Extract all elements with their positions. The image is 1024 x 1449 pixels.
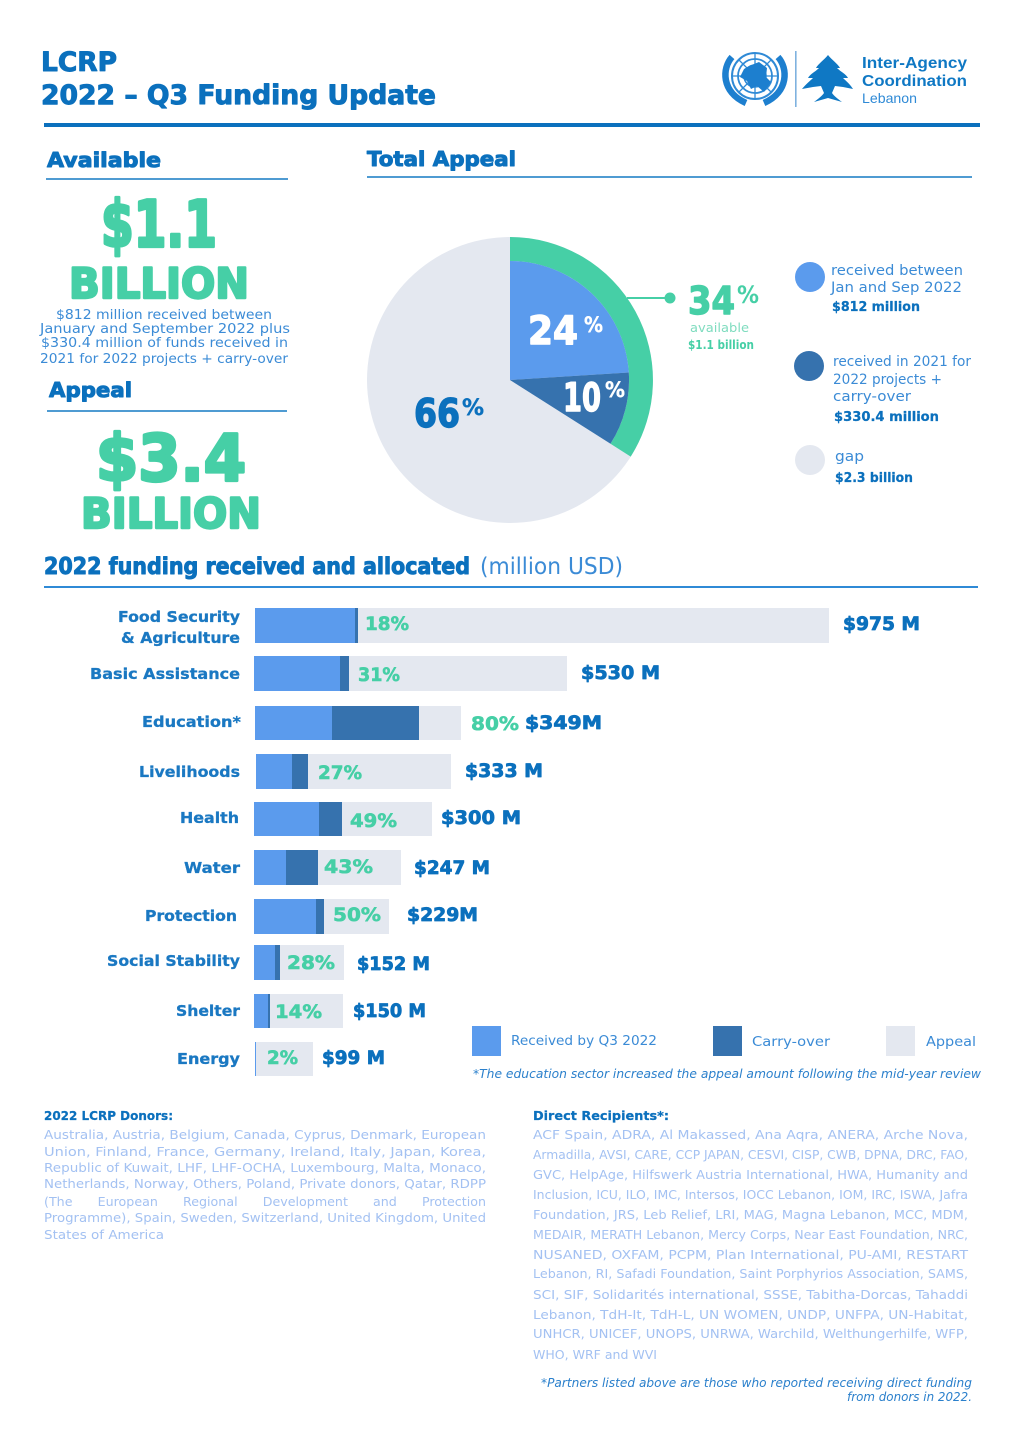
text block: donors: 2022 LCRP Donors:: [44, 1108, 173, 1123]
legend: gap: gap: [835, 449, 864, 465]
title: [41, 47, 436, 111]
row: livelihoods: 27%: [318, 762, 362, 784]
row: food security: $975 M: [843, 613, 920, 635]
text block: direct recipients: UNHCR, UNICEF, UNOPS, UNRWA, Warchild, Welthungerhilfe, WFP,: [533, 1327, 968, 1341]
text block: direct recipients: Inclusion, ICU, ILO, IMC, Intersos, IOCC Lebanon, IOM, IRC, ISWA, Jafra: [533, 1188, 968, 1202]
text block: direct recipients: Direct Recipients*:: [533, 1108, 669, 1123]
panel: total appeal: [367, 147, 972, 523]
row: protection: $229M: [407, 904, 478, 926]
logo text: Coordination: [862, 73, 967, 90]
panel: appeal: [47, 378, 287, 538]
text block: direct recipients: Armadilla, AVSI, CARE, CCP JAPAN, CESVI, CISP, CWB, DPNA, DRC, FAO,: [533, 1148, 968, 1162]
row: protection: 50%: [333, 904, 381, 926]
partners footnote: *Partners listed above are those who reported receiving direct funding: [541, 1376, 972, 1390]
legend: gap: $2.3 billion: [835, 470, 913, 486]
icon: cedar tree: [802, 55, 853, 102]
row: social stability: [107, 945, 430, 980]
text block: donors: Union, Finland, France, Germany, Ireland, Italy, Japan, Korea,: [44, 1145, 486, 1159]
text block: donors: [44, 1108, 486, 1242]
bar chart legend: [472, 1026, 976, 1056]
available description: $330.4 million of funds received in: [41, 336, 288, 351]
bar chart legend: Carry-over: [752, 1034, 830, 1050]
text block: direct recipients: [533, 1108, 969, 1362]
bar chart: funding by sector: [90, 608, 920, 1076]
divider line: [795, 51, 797, 107]
big number: 1.1 billion: [69, 188, 249, 308]
title: 2022 – Q3 Funding Update: [41, 80, 436, 111]
row: health: 49%: [350, 810, 397, 832]
education footnote: *The education sector increased the appeal amount following the mid-year review: [473, 1067, 981, 1081]
row: social stability: 28%: [287, 952, 335, 974]
heading: 2022 funding received and allocated: 2022 funding received and allocated: [44, 554, 470, 580]
row: basic assistance: Basic Assistance: [90, 665, 240, 683]
big number: 3.4 billion: $3.4: [96, 422, 246, 496]
text block: donors: Australia, Austria, Belgium, Canada, Cyprus, Denmark, European: [44, 1128, 486, 1142]
legend: received 2022: $812 million: [832, 299, 920, 315]
text block: direct recipients: NUSANED, OXFAM, PCPM, Plan International, PU-AMI, RESTART: [533, 1248, 969, 1262]
heading: 2022 funding received and allocated: [44, 554, 978, 588]
row: food security: [118, 608, 920, 647]
row: basic assistance: [90, 656, 660, 691]
callout: 34 percent available: $1.1 billion: [688, 338, 754, 352]
text block: direct recipients: SCI, SIF, Solidarités international, SSSE, Tabitha-Dorcas, Tahaddi: [533, 1288, 968, 1302]
row: education: 80%: [471, 713, 519, 735]
available description: [39, 308, 290, 367]
row: education: [142, 706, 602, 740]
big number: 1.1 billion: $1.1: [101, 188, 217, 262]
text block: direct recipients: MEDAIR, MERATH Lebanon, Mercy Corps, Near East Foundation, NRC,: [533, 1228, 968, 1242]
callout: 34 percent available: 34: [688, 279, 735, 323]
text block: donors: (The European Regional Development and Protection: [44, 1195, 486, 1209]
pie chart: 66: [414, 392, 460, 437]
text block: direct recipients: Lebanon, RI, Safadi Foundation, Saint Porphyrios Association, SAMS,: [533, 1267, 968, 1281]
row: water: $247 M: [414, 857, 490, 879]
pie legend: [794, 262, 971, 486]
row: water: 43%: [324, 856, 373, 878]
legend: received 2021: $330.4 million: [834, 409, 939, 425]
panel: available: [39, 148, 290, 367]
logo text: Lebanon: [862, 90, 917, 106]
text block: direct recipients: GVC, HelpAge, Hilfswerk Austria International, HWA, Humanity and: [533, 1168, 968, 1182]
icon: UN emblem: [725, 53, 785, 103]
legend: received 2021: received in 2021 for: [833, 354, 971, 370]
row: health: $300 M: [441, 807, 521, 829]
text block: direct recipients: WHO, WRF and WVI: [533, 1348, 657, 1362]
legend: received 2022: [795, 262, 963, 315]
text block: direct recipients: Lebanon, TdH-It, TdH-L, UN WOMEN, UNDP, UNFPA, UN-Habitat,: [533, 1308, 968, 1322]
pie chart: 24: [528, 309, 578, 354]
title: LCRP: [41, 47, 117, 78]
legend: gap: [795, 445, 913, 486]
pie chart: %: [462, 396, 484, 421]
row: food security: & Agriculture: [121, 629, 240, 647]
pie chart: %: [605, 378, 625, 402]
row: education: Education*: [142, 713, 241, 731]
row: education: $349M: [525, 712, 602, 734]
logos: UN and Inter-Agency Coordination Lebanon: [725, 51, 967, 107]
text block: donors: Republic of Kuwait, LHF, LHF-OCHA, Luxembourg, Malta, Monaco,: [44, 1161, 486, 1175]
callout: 34 percent available: %: [737, 281, 759, 309]
pie chart: %: [584, 313, 603, 337]
legend: received 2021: carry-over: [833, 389, 911, 405]
callout: 34 percent available: available: [690, 321, 749, 335]
row: social stability: $152 M: [357, 953, 430, 975]
big number: 1.1 billion: BILLION: [69, 259, 249, 308]
row: food security: 18%: [365, 613, 409, 635]
text block: direct recipients: ACF Spain, ADRA, Al Makassed, Ana Aqra, ANERA, Arche Nova,: [533, 1128, 968, 1142]
available description: January and September 2022 plus: [39, 322, 290, 337]
row: water: [184, 850, 490, 885]
heading: appeal: Appeal: [49, 378, 132, 402]
text block: donors: Programme), Spain, Sweden, Switzerland, United Kingdom, United: [44, 1211, 486, 1225]
row: shelter: [176, 994, 426, 1028]
pie chart: [367, 237, 653, 523]
available description: $812 million received between: [56, 308, 272, 323]
big number: 3.4 billion: [81, 422, 261, 538]
row: livelihoods: [139, 754, 543, 789]
row: shelter: 14%: [275, 1001, 322, 1023]
row: protection: [145, 899, 478, 934]
text block: donors: Netherlands, Norway, Others, Poland, Private donors, Qatar, RDPP: [44, 1177, 486, 1191]
pie chart: 10: [563, 376, 601, 421]
row: shelter: $150 M: [353, 1000, 426, 1022]
heading: 2022 funding received and allocated: (million USD): [480, 554, 623, 580]
row: protection: Protection: [145, 907, 237, 925]
row: basic assistance: 31%: [358, 664, 400, 686]
logo text: Inter-Agency: [862, 55, 967, 72]
available description: 2021 for 2022 projects + carry-over: [40, 352, 289, 367]
partners footnote: [541, 1376, 972, 1404]
bar chart legend: Appeal: [926, 1034, 976, 1050]
logo text: [862, 55, 967, 106]
bar chart legend: Received by Q3 2022: [511, 1033, 657, 1049]
row: food security: Food Security: [118, 608, 240, 626]
row: health: Health: [180, 809, 239, 827]
callout: 34 percent available: [627, 279, 759, 352]
legend: received 2021: 2022 projects +: [833, 372, 942, 388]
row: energy: Energy: [177, 1050, 240, 1068]
text block: donors: States of America: [44, 1228, 164, 1242]
legend: received 2021: [794, 351, 971, 425]
legend: received 2022: received between: [831, 263, 963, 279]
row: water: Water: [184, 859, 241, 877]
row: energy: $99 M: [322, 1047, 385, 1069]
row: health: [180, 802, 521, 836]
row: energy: [177, 1042, 385, 1076]
row: livelihoods: Livelihoods: [139, 763, 240, 781]
row: social stability: Social Stability: [107, 952, 240, 970]
partners footnote: from donors in 2022.: [847, 1390, 972, 1404]
row: basic assistance: $530 M: [581, 662, 660, 684]
legend: received 2022: Jan and Sep 2022: [830, 280, 962, 296]
big number: 3.4 billion: BILLION: [81, 489, 261, 538]
row: energy: 2%: [267, 1047, 298, 1069]
heading: total appeal: Total Appeal: [367, 147, 516, 171]
row: livelihoods: $333 M: [465, 760, 543, 782]
row: shelter: Shelter: [176, 1002, 241, 1020]
text block: direct recipients: Foundation, JRS, Leb Relief, LRI, MAG, Magna Lebanon, MCC, MDM,: [533, 1208, 968, 1222]
heading: available: Available: [47, 148, 161, 172]
